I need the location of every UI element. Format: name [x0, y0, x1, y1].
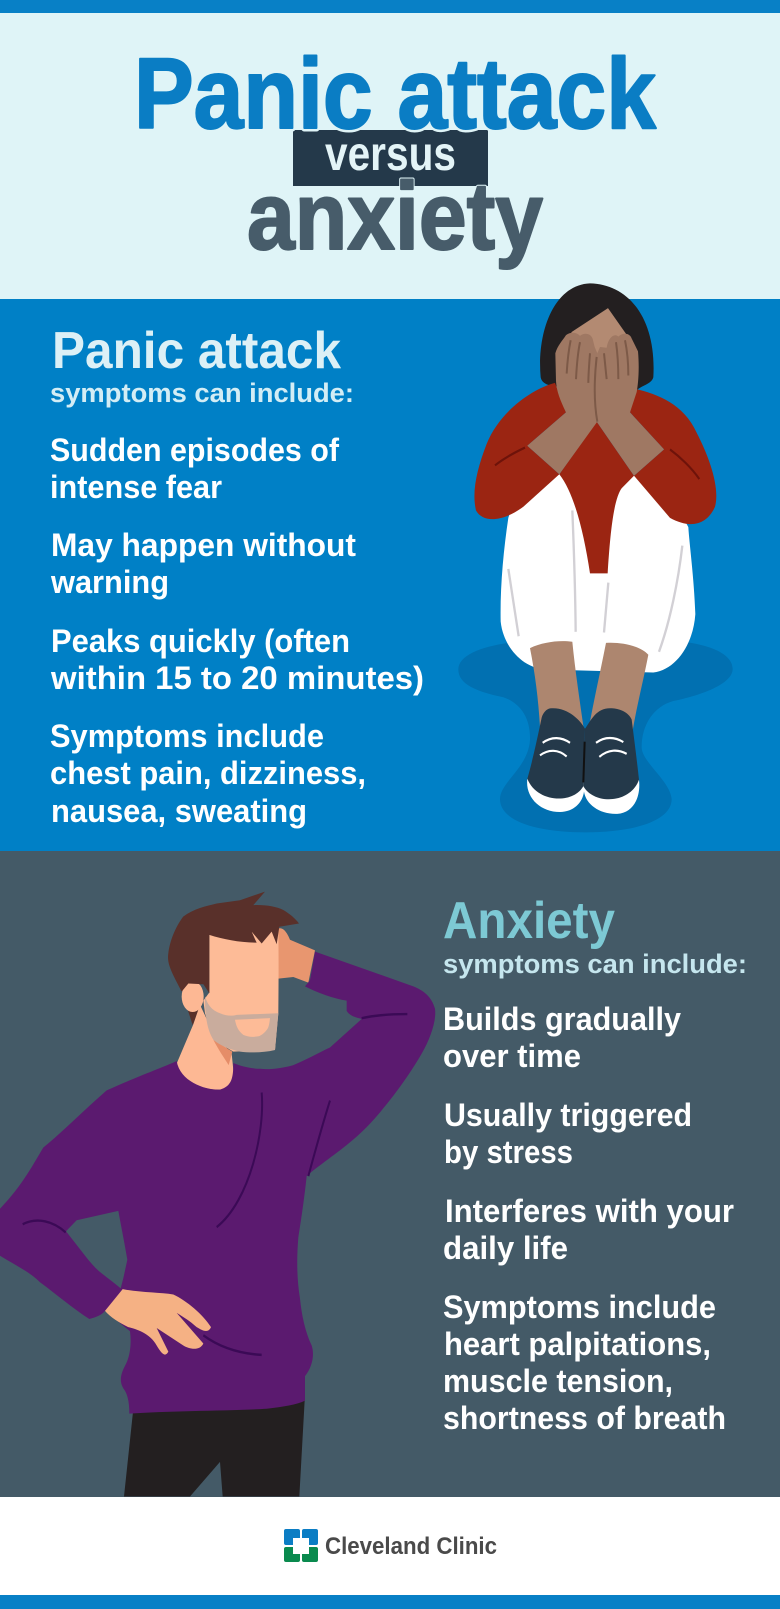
symptom: physical symptoms: nausea, sweating: [51, 793, 307, 829]
symptom: physical symptoms: muscle tension,: [443, 1363, 673, 1399]
symptom: physical symptoms: shortness of breath: [443, 1400, 726, 1436]
heading: anxiety: Anxiety: [443, 892, 615, 950]
symptom: peaks quickly: Peaks quickly (often: [51, 623, 350, 659]
hair: [540, 283, 654, 390]
symptom: sudden fear: Sudden episodes of: [50, 432, 339, 468]
symptom: interferes with life: daily life: [443, 1230, 568, 1266]
symptom: peaks quickly: within 15 to 20 minutes): [50, 660, 424, 696]
white trousers: [501, 474, 695, 673]
beard: [205, 997, 278, 1052]
subheading: symptoms can include:: [443, 949, 747, 979]
symptom: builds gradually: [443, 1001, 681, 1074]
symptom: physical symptoms: Symptoms include: [443, 1289, 716, 1325]
symptom: peaks quickly: [50, 623, 424, 696]
panel: footer background: [0, 1497, 780, 1595]
panel: anxiety background: [0, 851, 780, 1497]
title: panic attack: Panic attack: [134, 38, 656, 150]
gap between arm and torso: [66, 1211, 127, 1288]
title: anxiety: anxiety: [247, 163, 543, 270]
symptom: interferes with life: Interferes with your: [445, 1193, 734, 1229]
hand on hip: [105, 1289, 211, 1355]
finger lines: [567, 340, 628, 422]
versus box: [293, 130, 488, 186]
symptom: without warning: May happen without: [51, 527, 356, 563]
subheading: symptoms can include:: [50, 378, 354, 408]
top bar: [0, 0, 780, 13]
hair: [168, 892, 299, 993]
symptom: without warning: [50, 527, 356, 600]
wordmark: Cleveland Clinic: [325, 1533, 497, 1560]
symptom: physical symptoms: Symptoms include: [50, 718, 324, 754]
symptom: physical symptoms: heart palpitations,: [444, 1326, 711, 1362]
symptom: triggered by stress: [444, 1097, 692, 1170]
face: [557, 308, 637, 392]
bottom bar: [0, 1595, 780, 1609]
panel: panic attack background: [0, 299, 780, 851]
neck: [176, 1005, 233, 1090]
panic attack text block: [50, 322, 424, 829]
versus label: versus: [325, 128, 456, 181]
title: panic attack: Panic attack: [134, 38, 656, 150]
symptom: interferes with life: [443, 1193, 734, 1266]
symptom: builds gradually: Builds gradually: [443, 1001, 681, 1037]
symptom: triggered by stress: by stress: [444, 1134, 573, 1170]
symptom: triggered by stress: Usually triggered: [444, 1097, 692, 1133]
symptom: builds gradually: over time: [443, 1038, 581, 1074]
symptom: physical symptoms: chest pain, dizziness,: [50, 755, 366, 791]
sleeve creases: [495, 448, 699, 479]
illustration: woman covering her face: [458, 283, 733, 832]
trouser folds: [508, 510, 682, 652]
legs: [530, 641, 648, 731]
anxiety text block: [443, 892, 747, 1436]
symptom: without warning: warning: [50, 564, 169, 600]
hand on head: [277, 928, 315, 983]
logo: Cleveland Clinic: [284, 1529, 497, 1562]
symptom: sudden fear: [50, 432, 339, 505]
back of neck hair: [182, 984, 203, 1025]
symptom: sudden fear: intense fear: [50, 469, 222, 505]
red sweater: [474, 383, 716, 573]
ear: [182, 981, 204, 1012]
panel: title header: [0, 13, 780, 299]
sweater creases: [23, 1014, 407, 1355]
illustration: man holding his head: [0, 892, 435, 1497]
mouth area: [235, 1018, 270, 1037]
black trousers: [124, 1394, 305, 1497]
face: [203, 931, 279, 1052]
title: anxiety: anxiety: [247, 163, 543, 270]
icon: cross logo: [284, 1529, 318, 1562]
neck shadow: [213, 1040, 232, 1065]
hands and forearms: [527, 333, 664, 476]
floor shadow: [458, 640, 733, 832]
purple sweater: [0, 952, 435, 1414]
symptom: physical symptoms: [443, 1289, 726, 1436]
heading: panic attack: Panic attack: [52, 322, 341, 380]
shoes: [527, 708, 639, 814]
symptom: physical symptoms: [50, 718, 366, 829]
